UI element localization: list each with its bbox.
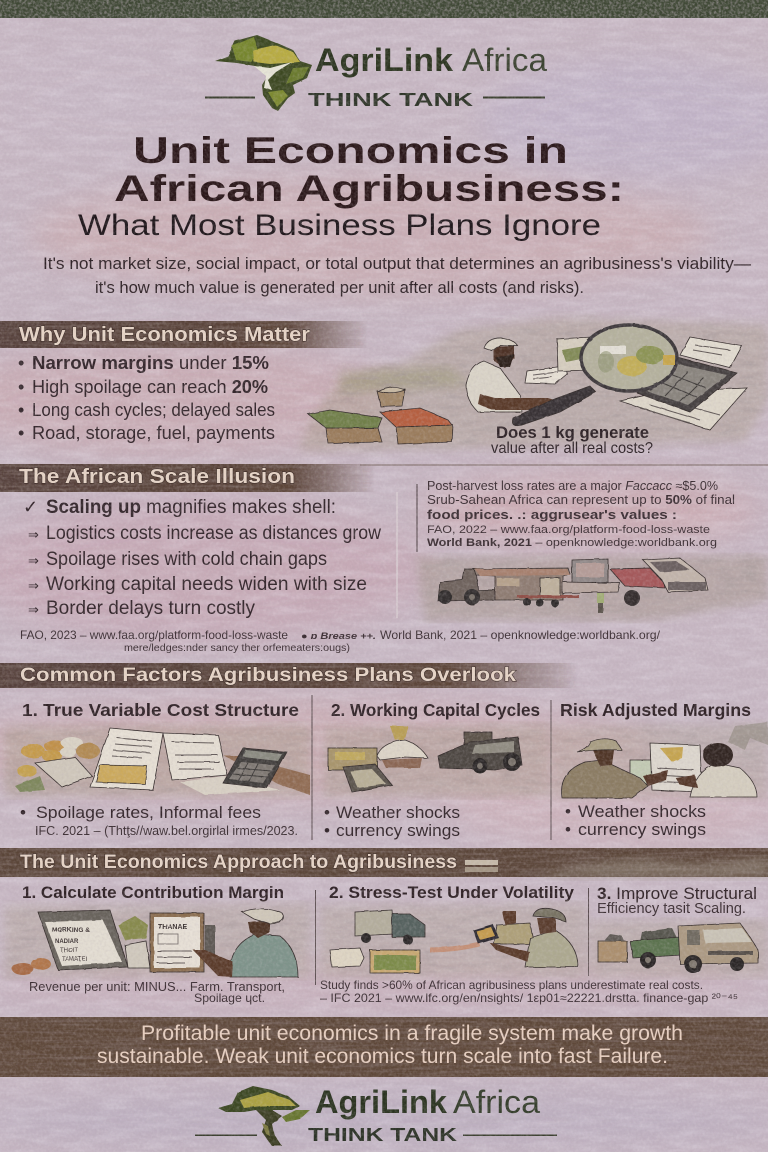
bullet list: why unit economics matter: Long cash cycles; delayed sales (32, 399, 275, 420)
checklist: scale illusion (23, 497, 381, 619)
bullet list: why unit economics matter (18, 352, 275, 443)
illustration: farmer, machine and cashbox (324, 725, 549, 796)
farmer (466, 338, 567, 412)
wordmark (315, 1084, 540, 1120)
section header: common factors: Common Factors Agribusiness Plans Overlook (20, 665, 516, 686)
callout: post-harvest statistics: food prices. .: aggrusear's values : (427, 507, 677, 522)
bullet list: why unit economics matter: Road, storage, fuel, payments (32, 422, 275, 443)
bullets: currency swings (336, 821, 460, 840)
illustration: ledgers and calculator (5, 725, 310, 796)
panel: true variable cost structure (5, 700, 310, 838)
closing banner: Profitable unit economics in a fragile system make growth (141, 1022, 683, 1045)
checklist: scale illusion: ⇒ (28, 553, 39, 568)
formula note: Spoilage ɥct. (194, 991, 265, 1005)
section header: why unit economics matter (0, 321, 368, 348)
bullet and source (20, 803, 298, 838)
illustration: man with worksheets: NADIAR (55, 939, 79, 945)
illustration: man with worksheets (5, 904, 310, 977)
bullets (565, 802, 706, 839)
logo: header (205, 35, 547, 111)
bullet list: why unit economics matter: Narrow margins under 15% (32, 352, 269, 373)
checklist: scale illusion: ✓ (23, 497, 38, 517)
checklist: scale illusion: Spoilage rises with cold chain gaps (46, 549, 327, 570)
illustration: two men reviewing a map (552, 722, 768, 798)
checklist: scale illusion: Logistics costs increase as distances grow (46, 523, 381, 544)
illustration: man with worksheets: THANAE (158, 924, 187, 931)
bullet list: why unit economics matter: • (18, 377, 24, 397)
panel: stress-test under volatility (315, 883, 738, 1005)
study finding (320, 978, 738, 1005)
crates of produce (308, 387, 453, 444)
icon: stacked crates (465, 860, 498, 872)
study finding: – IFC 2021 – www.lfc.org/en/nsights/ 1εp01≈22221.drstta. finance-gap ²⁰⁻⁴⁵ (320, 991, 738, 1005)
intro paragraph: it's how much value is generated per unit after all costs (and risks). (95, 278, 584, 297)
panel: risk adjusted margins: Risk Adjusted Margins (560, 700, 751, 720)
callout: post-harvest statistics: FAO, 2022 – www.faa.org/platform-food-loss-waste (427, 524, 710, 536)
callout: post-harvest statistics: Post-harvest loss rates are a major Faccacc ≈$5.0% (427, 479, 718, 493)
checklist: scale illusion: Scaling up magnifies makes shell: (46, 497, 336, 518)
section header: unit economics approach: The Unit Economics Approach to Agribusiness (20, 852, 457, 873)
bullets: • (324, 803, 330, 822)
wordmark: AgriLink (315, 42, 453, 78)
checklist: scale illusion: ⇒ (28, 527, 39, 542)
checklist: scale illusion: Border delays turn costly (46, 598, 255, 619)
formula note: Revenue per unit: MINUS... Farm. Transport, (29, 980, 285, 994)
illustration: trucks on a road (417, 556, 768, 620)
tagline: think tank: THINK TANK (308, 1125, 457, 1145)
title (114, 130, 624, 209)
source footnote: scale illusion: FAO, 2023 – www.faa.org/platform-food-loss-waste (20, 628, 288, 642)
icon: Africa acacia tree (215, 35, 312, 111)
panel: calculate contribution margin (5, 883, 310, 1005)
closing banner (0, 1017, 768, 1077)
icon: Africa acacia tree (218, 1086, 310, 1146)
bullets (324, 803, 460, 840)
panel: improve structural efficiency: Efficiency tasit Scaling. (597, 900, 746, 917)
bullet list: why unit economics matter: • (18, 400, 24, 420)
wordmark: Africa (453, 1084, 540, 1120)
panel: working capital cycles (312, 695, 549, 840)
bullets: currency swings (578, 820, 706, 839)
closing banner: sustainable. Weak unit economics turn scale into fast Failure. (97, 1045, 668, 1068)
bullets: • (565, 820, 571, 839)
illustration: man with worksheets: THOIT (60, 948, 78, 954)
bullet and source: IFC. 2021 – (Thtţs//waw.bel.orgirlal irmes/2023. (35, 824, 298, 838)
bullets: • (565, 802, 571, 821)
source footnote: scale illusion: ● ɒ Brease ++. (301, 631, 376, 641)
source footnote: scale illusion: World Bank, 2021 – openknowledge:worldbank.org/ (380, 628, 661, 642)
section header: common factors (0, 663, 578, 688)
white box truck (572, 559, 608, 583)
magnifying glass (512, 325, 677, 426)
source footnote: scale illusion (20, 628, 661, 654)
caption: does 1 kg generate value: value after all real costs? (491, 440, 653, 457)
bullets: Weather shocks (578, 802, 706, 821)
checklist: scale illusion: ⇒ (28, 602, 39, 617)
panel: improve structural efficiency: 3. Improve Structural (597, 884, 757, 903)
logo: footer (195, 1084, 557, 1146)
bullet and source: • (20, 803, 26, 822)
bullet list: why unit economics matter: • (18, 353, 24, 373)
intro paragraph (43, 254, 751, 297)
study finding: Study finds >60% of African agribusiness plans underestimate real costs. (320, 978, 703, 992)
caption: does 1 kg generate value (491, 424, 653, 457)
red canopy (610, 568, 665, 588)
formula note (29, 980, 285, 1005)
bullet list: why unit economics matter: High spoilage can reach 20% (32, 376, 268, 397)
standing figure (597, 593, 604, 603)
section header: why unit economics matter: Why Unit Economics Matter (19, 324, 310, 346)
subtitle: What Most Business Plans Ignore (78, 209, 601, 242)
illustration: farmer with magnifier, calculator and produce crates (300, 318, 768, 450)
flatbed trailer (517, 595, 579, 598)
callout: post-harvest statistics: World Bank, 2021 – openknowledge:worldbank.org (427, 537, 717, 549)
bullet and source: Spoilage rates, Informal fees (36, 803, 261, 822)
callout: post-harvest statistics (416, 479, 735, 552)
title: Unit Economics in (133, 130, 568, 171)
white van (643, 558, 708, 592)
wordmark: AgriLink (315, 1084, 447, 1120)
illustration: truck and two men with a tablet (320, 904, 586, 977)
title: African Agribusiness: (114, 168, 624, 209)
checklist: scale illusion: Working capital needs widen with size (46, 574, 367, 595)
intro paragraph: It's not market size, social impact, or total output that determines an agribusiness's viability— (43, 254, 751, 273)
illustration: loaded truck (590, 920, 768, 977)
bullet list: why unit economics matter: • (18, 423, 24, 443)
truck with cabin (438, 569, 495, 601)
tagline: think tank: THINK TANK (308, 89, 474, 110)
section header: unit economics approach (0, 848, 768, 877)
top grass band (0, 0, 768, 18)
panel: improve structural efficiency (588, 884, 768, 977)
section header: the african scale illusion: The African Scale Illusion (19, 466, 295, 488)
illustration: man with worksheets: TAMATEI (62, 957, 87, 963)
map, papers and calculator (557, 337, 747, 430)
bullets: Weather shocks (336, 803, 460, 822)
panel: working capital cycles: 2. Working Capital Cycles (331, 700, 540, 720)
section header: the african scale illusion (0, 464, 768, 492)
wordmark: Africa (462, 42, 547, 78)
wordmark (315, 42, 547, 78)
bullets: • (324, 821, 330, 840)
panel: true variable cost structure: 1. True Variable Cost Structure (22, 700, 299, 720)
checklist: scale illusion: ⇒ (28, 578, 39, 593)
panel: risk adjusted margins (550, 700, 768, 840)
illustration: man with worksheets: MORKING & (52, 927, 90, 934)
panel: stress-test under volatility: 2. Stress-Test Under Volatility (329, 883, 575, 902)
callout: post-harvest statistics: Srub-Sahean Africa can represent up to 50% of final (427, 493, 735, 507)
source footnote: scale illusion: mere/ledges:nder sancy ther orfemeaters:ougs) (124, 642, 350, 654)
panel: calculate contribution margin: 1. Calculate Contribution Margin (22, 883, 284, 902)
caption: does 1 kg generate value: Does 1 kg generate (496, 424, 649, 442)
